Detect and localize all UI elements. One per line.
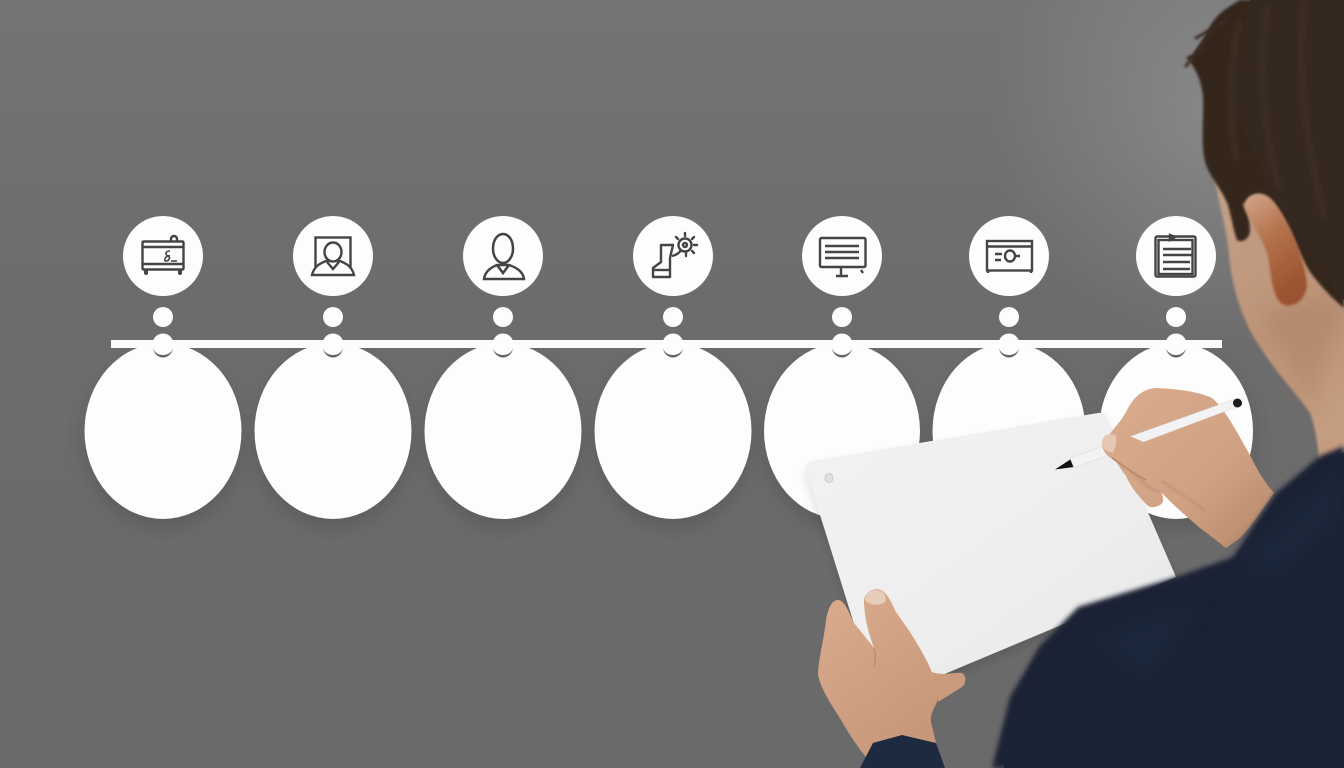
thumb of writing hand [1102,434,1176,482]
connectors: upper dots, lower dots and crescents [152,307,1186,358]
jaw shadow [1262,300,1344,412]
oval shadows [85,353,1253,529]
shirt folds [1090,470,1340,680]
icon 4: boot with sun [633,216,713,296]
blank oval 5 [764,343,920,519]
icon 5: monitor with text [802,216,882,296]
person: head and neck [1186,0,1344,470]
person: shirt and shoulder [860,446,1344,768]
paper sheet [806,413,1176,684]
icon 2: framed portrait [293,216,373,296]
writing hand [1104,388,1274,548]
shirt solid edge fill [1004,452,1344,768]
person: ear [1243,194,1307,306]
icon 6: panel with circle and dashes [969,216,1049,296]
hair solid edge fill [1230,0,1344,300]
left sleeve [860,735,945,768]
holding hand [818,589,965,757]
blank oval 1 [84,343,242,519]
blank oval 6 [932,343,1086,519]
pen [1055,398,1242,470]
blank oval 2 [254,343,412,519]
icon 7: clipboard document [1136,216,1216,296]
timeline bar [111,340,1222,348]
icon 1: board with signature [123,216,203,296]
icon 3: person bust [463,216,543,296]
neck solid edge fill [1300,250,1344,470]
blank oval 4 [594,343,752,519]
hair [1186,0,1344,308]
blank oval 3 [424,343,582,519]
blank oval 7 [1099,343,1253,519]
